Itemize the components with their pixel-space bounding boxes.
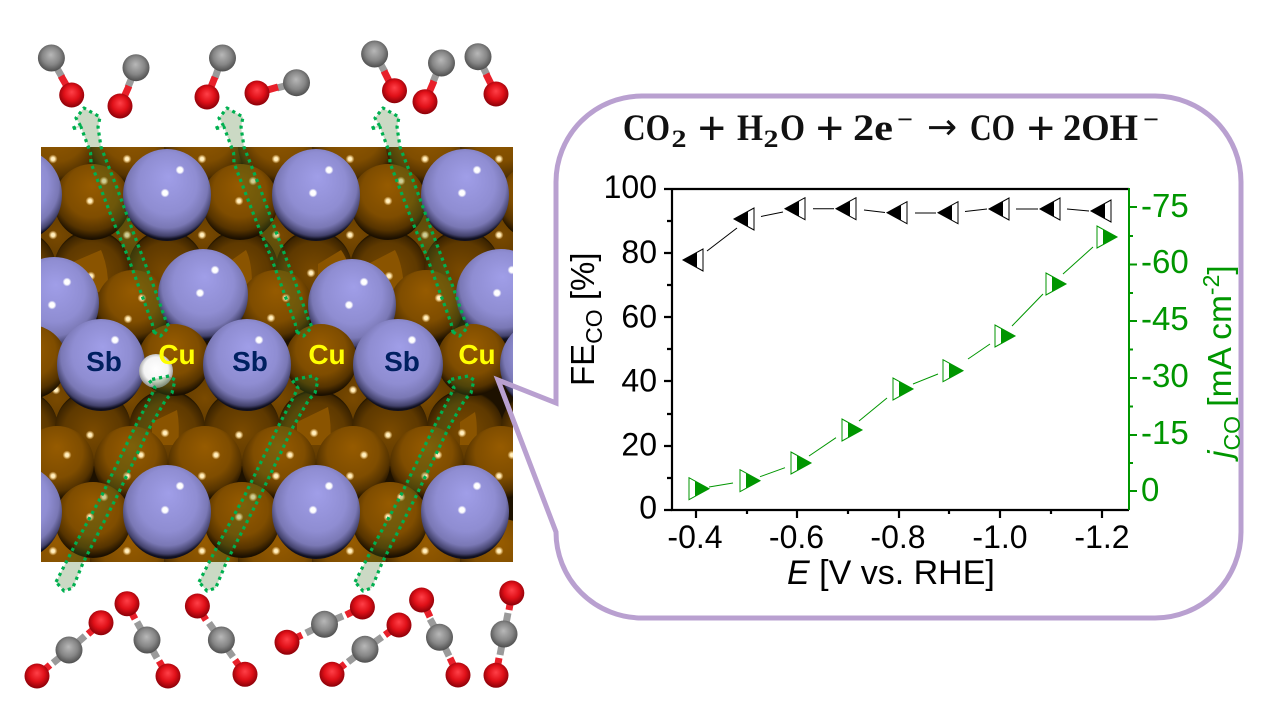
x axis tick labels: -0.4 [667,519,723,555]
arrows: CO leaving the surface [71,108,468,336]
x axis tick labels [667,519,1130,555]
title: reaction equation [623,100,1159,156]
right axis tick labels: -45 [1141,300,1189,337]
series: j CO connecting lines [709,247,1093,487]
title: reaction equation: + [816,100,844,156]
title: reaction equation: H [737,108,763,149]
title: reaction equation: 2OH [1063,108,1138,149]
left axis tick labels: 0 [639,490,657,526]
copper atoms, middle rows [41,164,513,558]
title: reaction equation: 2 [764,126,778,153]
right axis tick labels: 0 [1141,471,1159,508]
title: reaction equation: + [698,100,726,156]
right axis tick labels [1141,187,1189,508]
x axis tick labels: -1.2 [1074,519,1130,555]
antimony atoms, back rows [41,149,513,350]
label: Sb and Cu atoms: Sb [232,346,268,377]
title: reaction equation: O [780,108,805,149]
left axis title: CO [581,309,607,344]
arrows: CO2 moving into the surface [56,376,474,591]
series: FE CO markers [683,198,1111,271]
title: reaction equation: CO [623,108,670,149]
chart: Faradaic efficiency and current density vs potential [564,169,1245,592]
hydrogen atom [139,354,173,388]
right axis title: ] [1202,265,1239,275]
title: reaction equation: − [1143,105,1159,134]
left axis tick labels: 20 [621,426,657,462]
right axis title: [mA cm [1202,295,1239,416]
left axis tick labels [604,169,657,526]
back copper layers [41,147,513,562]
title: reaction equation: CO [970,108,1015,149]
CO2 molecules, bottom [24,580,524,688]
CO molecules, top [38,40,509,118]
right axis tick labels: -15 [1141,414,1189,451]
label: Sb and Cu atoms: Sb [86,346,122,377]
antimony highlights [28,166,516,514]
left axis tick labels: 60 [621,298,657,334]
series: j CO markers [689,226,1117,500]
right axis title: -2 [1198,275,1224,295]
left axis title: FE [564,344,601,386]
right axis tick labels: -60 [1141,243,1189,280]
label: Sb and Cu atoms: Sb [384,346,420,377]
copper highlights [48,154,516,556]
label: Sb and Cu atoms: Cu [308,339,346,370]
left axis tick labels: 80 [621,234,657,270]
x axis title: E [V vs. RHE] [787,554,995,592]
x axis tick labels: -1.0 [972,519,1028,555]
callout panel border with pointer [498,96,1241,618]
left axis tick labels: 40 [621,362,657,398]
title: reaction equation: 2 [672,126,686,153]
right axis tick labels: -75 [1141,187,1189,224]
left axis title: [%] [564,252,601,309]
title: reaction equation: + [1026,100,1055,156]
x axis tick labels: -0.6 [769,519,824,555]
title: reaction equation: → [927,107,957,148]
x axis tick labels: -0.8 [870,519,926,555]
title: reaction equation: 2e [853,108,893,149]
right axis title: j [1202,449,1239,462]
axes frame [664,189,1129,518]
title: reaction equation: − [897,105,913,134]
series: FE CO connecting lines [707,209,1089,251]
right axis title: CO [1219,416,1245,451]
front antimony atoms [41,319,513,559]
label: Sb and Cu atoms [86,339,496,377]
panel: atomic surface model [41,147,513,562]
label: Sb and Cu atoms: Cu [158,339,196,370]
label: Sb and Cu atoms: Cu [458,339,496,370]
right axis, green [1129,188,1137,510]
right axis tick labels: -30 [1141,357,1189,394]
left axis tick labels: 100 [604,169,657,205]
front copper atoms [41,324,505,397]
